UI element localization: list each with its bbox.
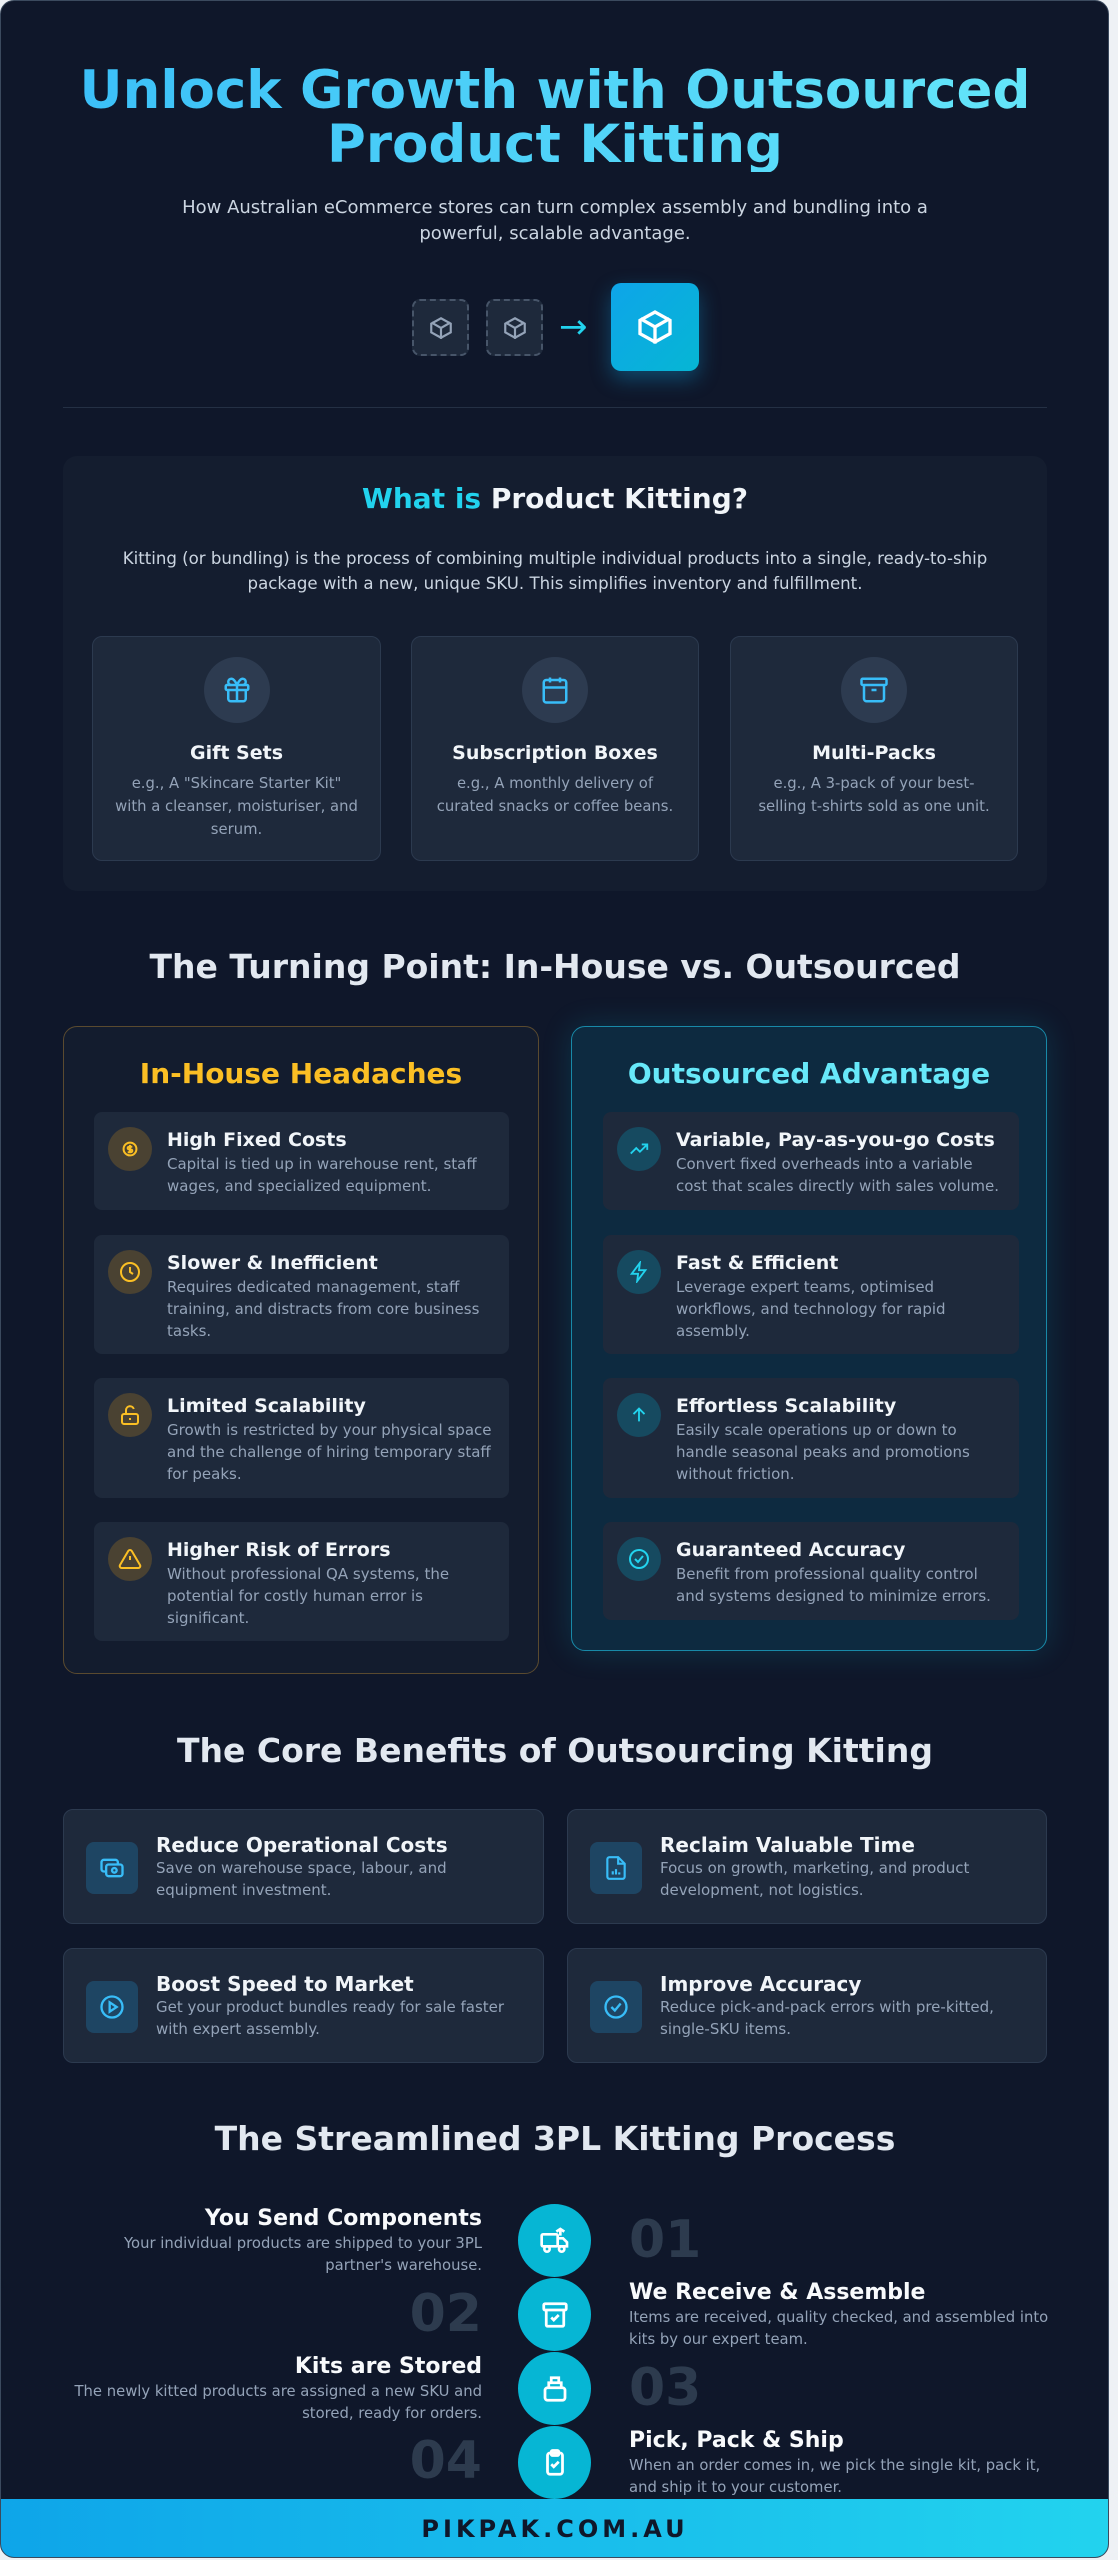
step 3 text: The newly kitted products are assigned a new SKU and stored, ready for orders. <box>74 2383 482 2422</box>
panel: outsourced advantage <box>571 1026 1047 1651</box>
item: higher risk: Higher Risk of Errors <box>167 1539 391 1561</box>
benefit: reduce costs: Save on warehouse space, labour, and equipment investment. <box>156 1859 447 1899</box>
item: higher risk <box>94 1522 509 1641</box>
card: subscription boxes: e.g., A monthly delivery of curated snacks or coffee beans. <box>437 775 673 815</box>
item: slower <box>94 1235 509 1354</box>
benefit: improve accuracy: Reduce pick-and-pack errors with pre-kitted, single-SKU items. <box>660 1998 994 2038</box>
step 3 icon <box>518 2352 591 2425</box>
benefit: boost speed: Get your product bundles ready for sale faster with expert assembly. <box>156 1998 504 2038</box>
step 4 text <box>629 2428 1040 2496</box>
icon: components to kit: → <box>559 307 588 347</box>
title: Unlock Growth with Outsourced <box>80 60 1030 121</box>
item: fast <box>603 1235 1019 1354</box>
item: variable costs: Variable, Pay-as-you-go Costs <box>676 1129 995 1151</box>
paragraph: Kitting (or bundling) is the process of combining multiple individual products into a single, ready-to-ship package with a new, unique SKU. This simplifies inventory and fulfillment. <box>123 549 987 593</box>
item: limited scalability: Limited Scalability <box>167 1395 366 1417</box>
item: effortless scalability <box>603 1378 1019 1498</box>
icon: components to kit <box>412 280 710 390</box>
title <box>1 64 1109 172</box>
item: guaranteed accuracy <box>603 1522 1019 1620</box>
item: slower: Requires dedicated management, staff training, and distracts from core business tasks. <box>167 1278 479 1340</box>
item: higher risk: Without professional QA systems, the potential for costly human error is significant. <box>167 1565 449 1627</box>
benefit: improve accuracy <box>567 1948 1047 2063</box>
card: gift sets: Gift Sets <box>190 742 283 764</box>
heading: turning point: The Turning Point: In-House vs. Outsourced <box>150 947 960 986</box>
column heading: In-House Headaches <box>140 1057 462 1090</box>
footer <box>1 2499 1109 2559</box>
card: multi-packs: e.g., A 3-pack of your best-selling t-shirts sold as one unit. <box>758 775 990 815</box>
card: multi-packs: Multi-Packs <box>812 742 936 764</box>
step 2 text: We Receive & Assemble <box>629 2280 925 2305</box>
step 3 text <box>74 2354 482 2422</box>
item: fast: Leverage expert teams, optimised workflows, and technology for rapid assembly. <box>676 1278 946 1340</box>
card: subscription boxes <box>411 636 699 861</box>
item: high fixed costs: High Fixed Costs <box>167 1129 347 1151</box>
card: subscription boxes: Subscription Boxes <box>452 742 658 764</box>
card: gift sets <box>92 636 381 861</box>
panel: what is product kitting <box>63 456 1047 891</box>
step 1 text <box>124 2206 482 2274</box>
subtitle: How Australian eCommerce stores can turn complex assembly and bundling into a powerful, scalable advantage. <box>182 197 928 244</box>
step 4 text: Pick, Pack & Ship <box>629 2428 844 2453</box>
step 4 text: When an order comes in, we pick the single kit, pack it, and ship it to your customer. <box>629 2457 1040 2496</box>
step 1 number: 01 <box>629 2210 701 2270</box>
item: slower: Slower & Inefficient <box>167 1252 378 1274</box>
benefit: reduce costs: Reduce Operational Costs <box>156 1833 448 1857</box>
item: effortless scalability: Easily scale operations up or down to handle seasonal peaks and promotions without friction. <box>676 1421 970 1483</box>
benefit: boost speed <box>63 1948 544 2063</box>
item: guaranteed accuracy: Benefit from professional quality control and systems designed to minimize errors. <box>676 1565 991 1605</box>
step 3 number: 03 <box>629 2358 701 2418</box>
benefit: reclaim time: Reclaim Valuable Time <box>660 1833 915 1857</box>
card: multi-packs <box>730 636 1018 861</box>
step 1 text: You Send Components <box>205 2206 482 2231</box>
footer: PIKPAK.COM.AU <box>421 2515 689 2543</box>
benefit: boost speed: Boost Speed to Market <box>156 1972 414 1996</box>
heading: What is Product Kitting? <box>362 482 748 515</box>
item: variable costs: Convert fixed overheads into a variable cost that scales directly with sales volume. <box>676 1155 999 1195</box>
step 1 icon <box>518 2204 591 2277</box>
item: variable costs <box>603 1112 1019 1210</box>
column heading: Outsourced Advantage <box>628 1057 990 1090</box>
step 2 icon <box>518 2278 591 2351</box>
item: high fixed costs: Capital is tied up in warehouse rent, staff wages, and specialized equipment. <box>167 1155 477 1195</box>
benefit: reclaim time: Focus on growth, marketing, and product development, not logistics. <box>660 1859 969 1899</box>
item: guaranteed accuracy: Guaranteed Accuracy <box>676 1539 905 1561</box>
card: gift sets: e.g., A "Skincare Starter Kit" with a cleanser, moisturiser, and serum. <box>115 775 358 838</box>
process timeline <box>74 2204 1048 2499</box>
item: effortless scalability: Effortless Scalability <box>676 1395 896 1417</box>
title: Product Kitting <box>327 114 783 175</box>
step 4 icon <box>518 2426 591 2499</box>
item: fast: Fast & Efficient <box>676 1252 838 1274</box>
benefit: reduce costs <box>63 1809 544 1924</box>
item: limited scalability <box>94 1378 509 1498</box>
step 2 text <box>629 2280 1048 2348</box>
item: limited scalability: Growth is restricted by your physical space and the challenge of hiring temporary staff for peaks. <box>167 1421 492 1483</box>
step 4 number: 04 <box>410 2431 482 2491</box>
step 1 text: Your individual products are shipped to your 3PL partner's warehouse. <box>124 2235 482 2274</box>
step 3 text: Kits are Stored <box>295 2354 482 2379</box>
step 2 text: Items are received, quality checked, and assembled into kits by our expert team. <box>629 2309 1048 2348</box>
benefit: improve accuracy: Improve Accuracy <box>660 1972 861 1996</box>
panel: in-house headaches <box>63 1026 539 1674</box>
benefit: reclaim time <box>567 1809 1047 1924</box>
heading: process: The Streamlined 3PL Kitting Process <box>215 2119 895 2158</box>
step 2 number: 02 <box>410 2284 482 2344</box>
heading: core benefits: The Core Benefits of Outsourcing Kitting <box>177 1731 933 1770</box>
item: high fixed costs <box>94 1112 509 1210</box>
